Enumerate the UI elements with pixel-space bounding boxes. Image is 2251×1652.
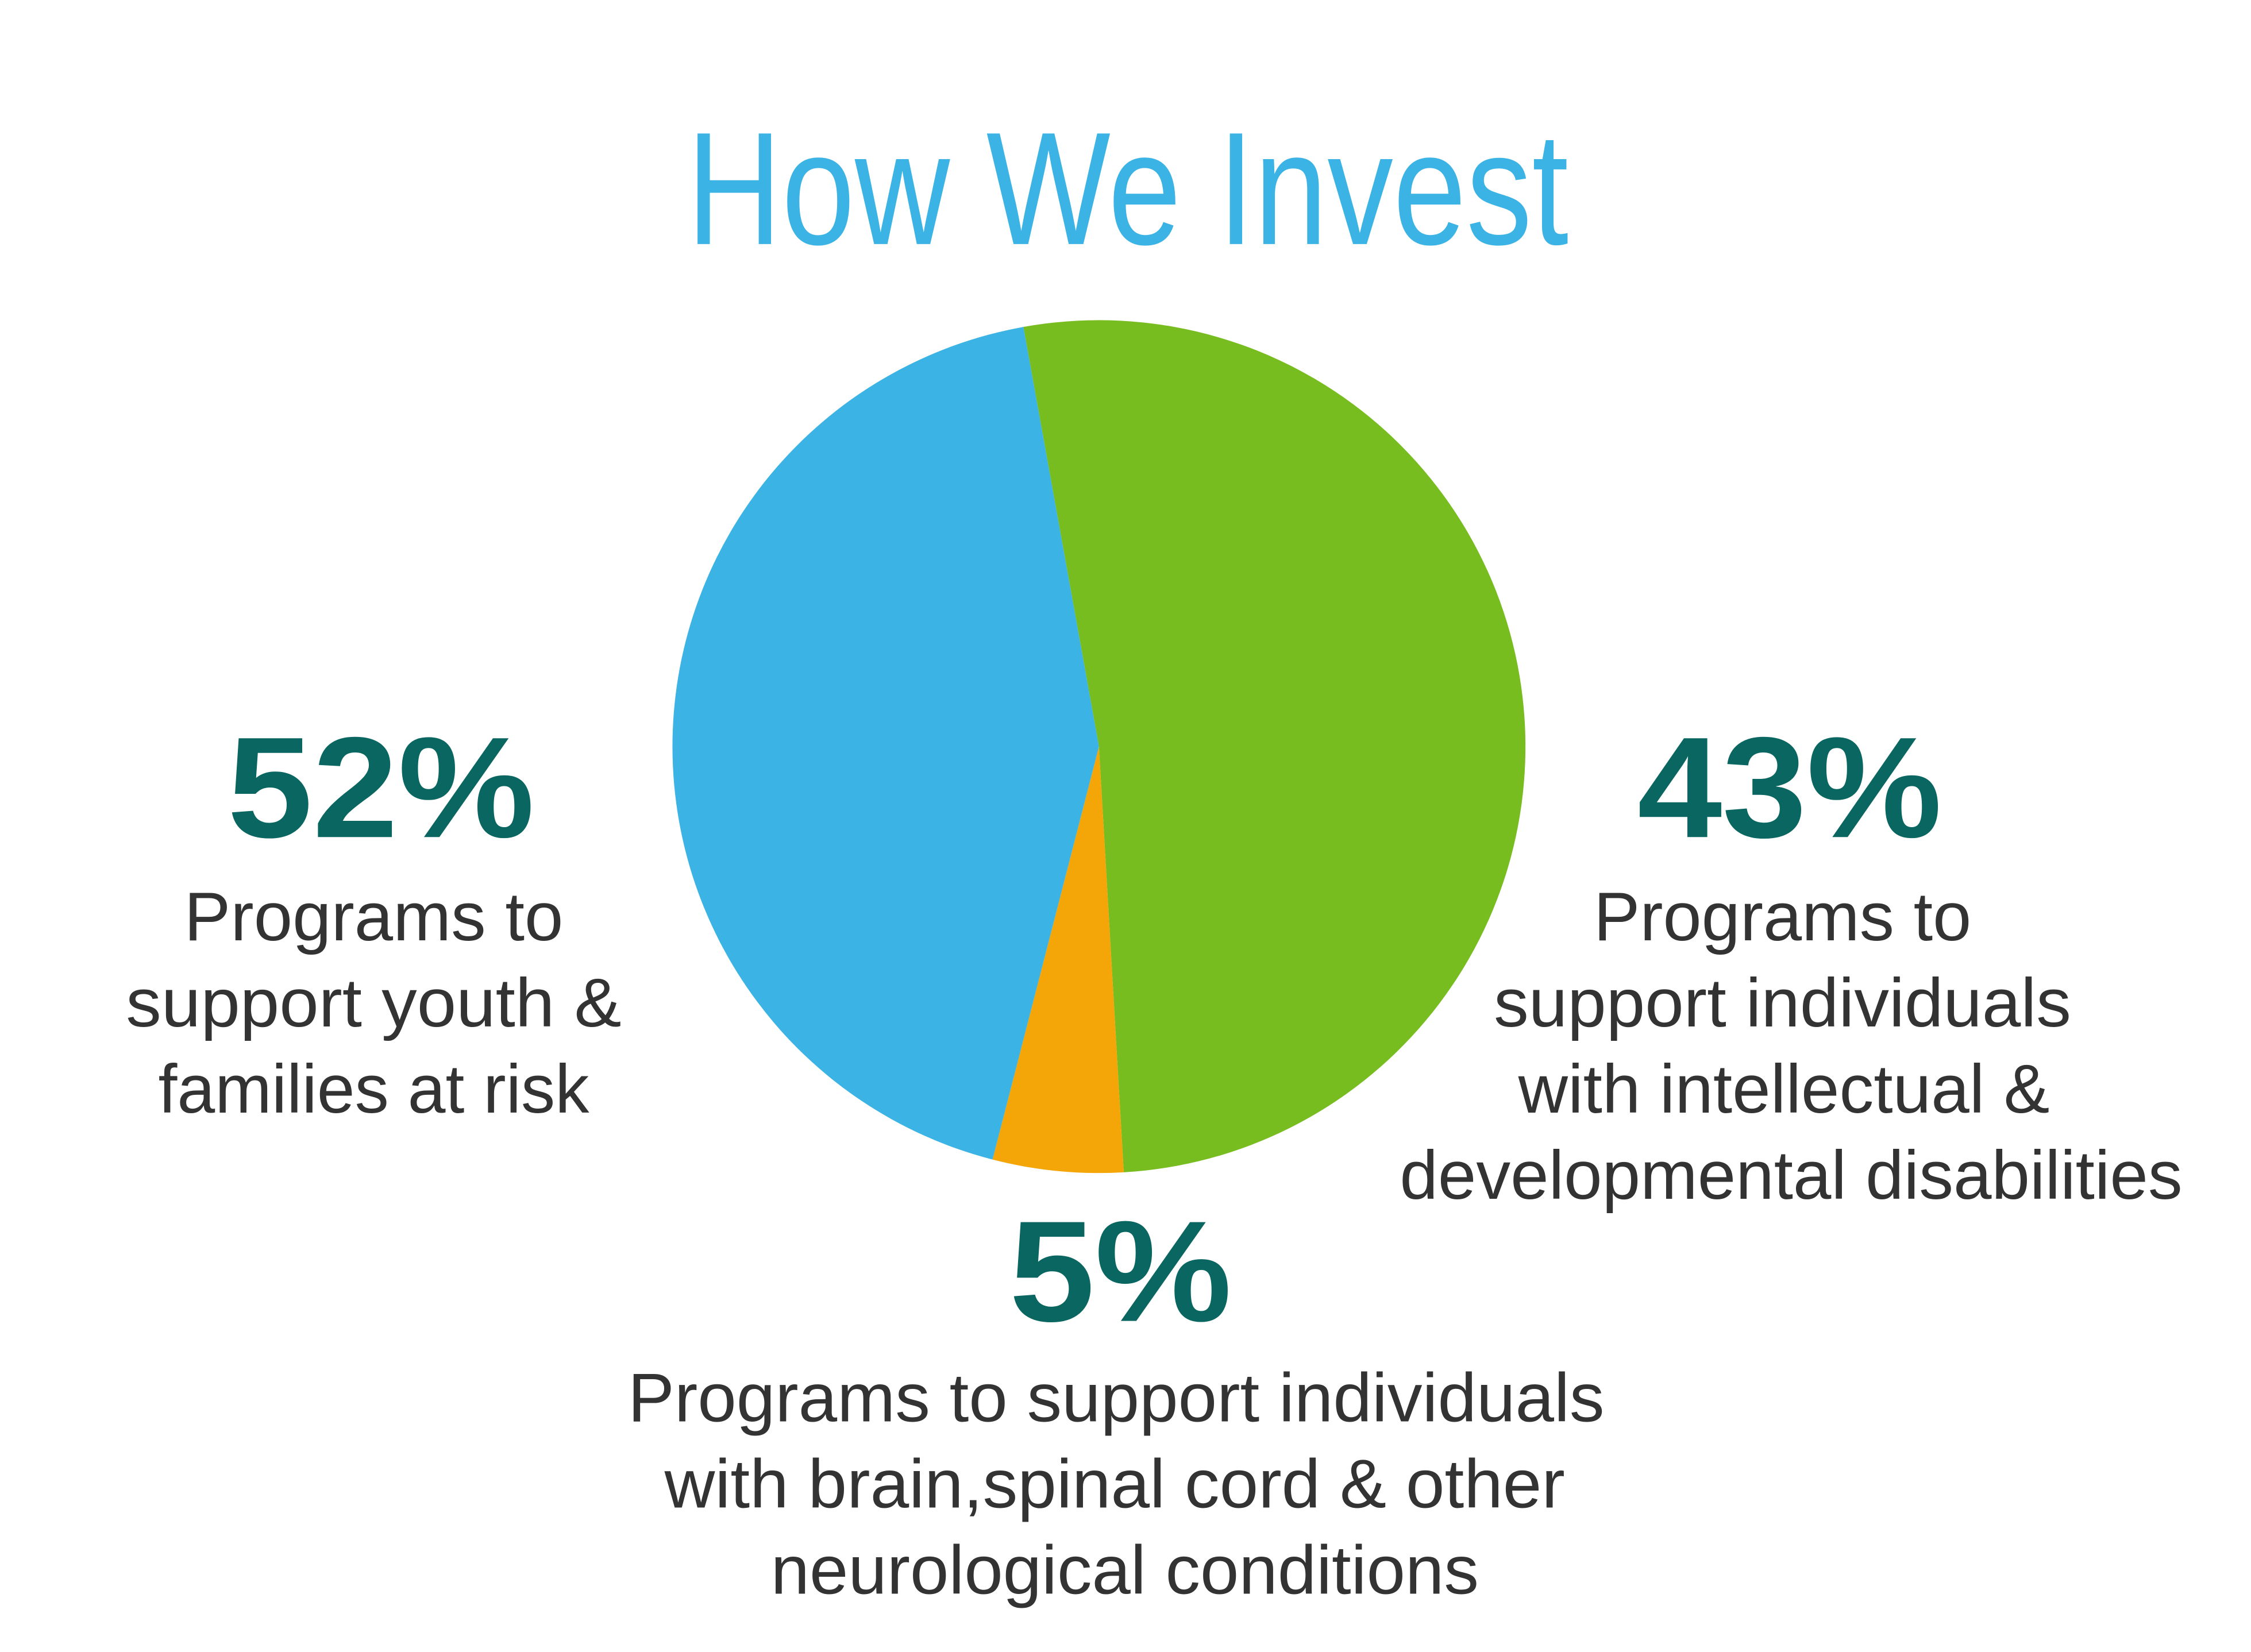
percentage 5%: 5% [1009,1191,1232,1352]
description 5%: neurological conditions [771,1532,1479,1609]
description 5% [628,1360,1605,1609]
description 52%: families at risk [159,1051,589,1128]
description 43%: Programs to [1594,878,1971,955]
description 43%: developmental disabilities [1400,1137,2183,1214]
description 5%: with brain,spinal cord & other [664,1446,1565,1523]
label: 52% youth & families [126,707,622,1128]
label: 5% neurological [628,1191,1605,1609]
description 52%: Programs to [184,878,563,955]
percentage 43%: 43% [1637,707,1942,867]
pie chart [672,320,1525,1173]
percentage 52%: 52% [228,707,534,867]
description 52% [126,878,622,1128]
slice: blue 52% [672,327,1099,1160]
slice: green 43% [1023,320,1525,1172]
label: 43% intellectual & developmental [1400,707,2183,1214]
description 5%: Programs to support individuals [628,1360,1605,1437]
slice: orange 5% [993,747,1124,1173]
description 43%: support individuals [1494,964,2071,1041]
title: How We Invest [687,99,1569,279]
description 43% [1400,878,2183,1214]
description 43%: with intellectual & [1518,1051,2049,1128]
description 52%: support youth & [126,964,622,1041]
